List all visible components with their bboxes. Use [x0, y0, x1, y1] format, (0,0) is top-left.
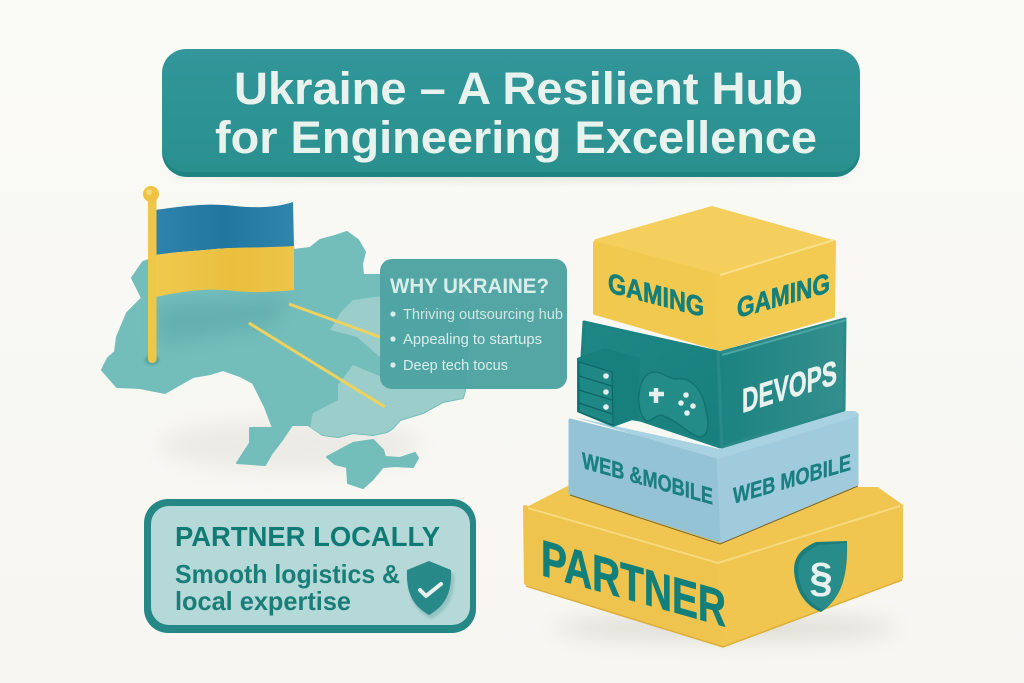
block: web and mobile: WEB MOBILE	[733, 449, 851, 509]
why Ukraine panel: Deep tech tocus	[403, 358, 508, 374]
why Ukraine panel: Appealing to startups	[403, 332, 542, 348]
partner locally callout: Smooth logistics &	[175, 559, 400, 589]
icon: section shield	[794, 541, 847, 612]
title banner: Ukraine – A Resilient Hub	[234, 63, 803, 114]
map of Ukraine	[102, 232, 470, 488]
icon: section shield: §	[809, 554, 833, 601]
block: partner base	[525, 487, 902, 647]
icon: game controller	[639, 372, 708, 437]
why Ukraine panel: Thriving outsourcing hub	[403, 307, 563, 323]
block: devops: DEVOPS	[742, 353, 837, 421]
map: lower lighter region	[310, 365, 466, 437]
partner locally callout	[144, 499, 476, 633]
block: web and mobile: WEB &MOBILE	[582, 447, 713, 510]
partner locally callout: PARTNER LOCALLY	[175, 521, 440, 552]
block: gaming: GAMING	[737, 267, 830, 325]
title banner	[162, 49, 860, 182]
partner locally callout: local expertise	[175, 586, 351, 616]
connector line to map	[249, 323, 385, 407]
icon: server rack	[577, 348, 640, 427]
block stack	[525, 208, 902, 647]
map: upper lighter region	[330, 296, 382, 359]
icon: shield check	[407, 561, 454, 619]
title banner: for Engineering Excellence	[215, 112, 817, 163]
block: web and mobile	[570, 411, 859, 544]
block: partner base: PARTNER	[541, 530, 726, 639]
why Ukraine panel: WHY UKRAINE?	[390, 275, 549, 298]
block: gaming	[595, 208, 834, 349]
flag of Ukraine	[143, 186, 294, 365]
block: gaming: GAMING	[608, 267, 704, 324]
block: devops	[577, 319, 846, 447]
map: flag shadow	[158, 296, 290, 345]
why Ukraine panel	[380, 259, 567, 389]
map: Crimea	[327, 440, 418, 488]
